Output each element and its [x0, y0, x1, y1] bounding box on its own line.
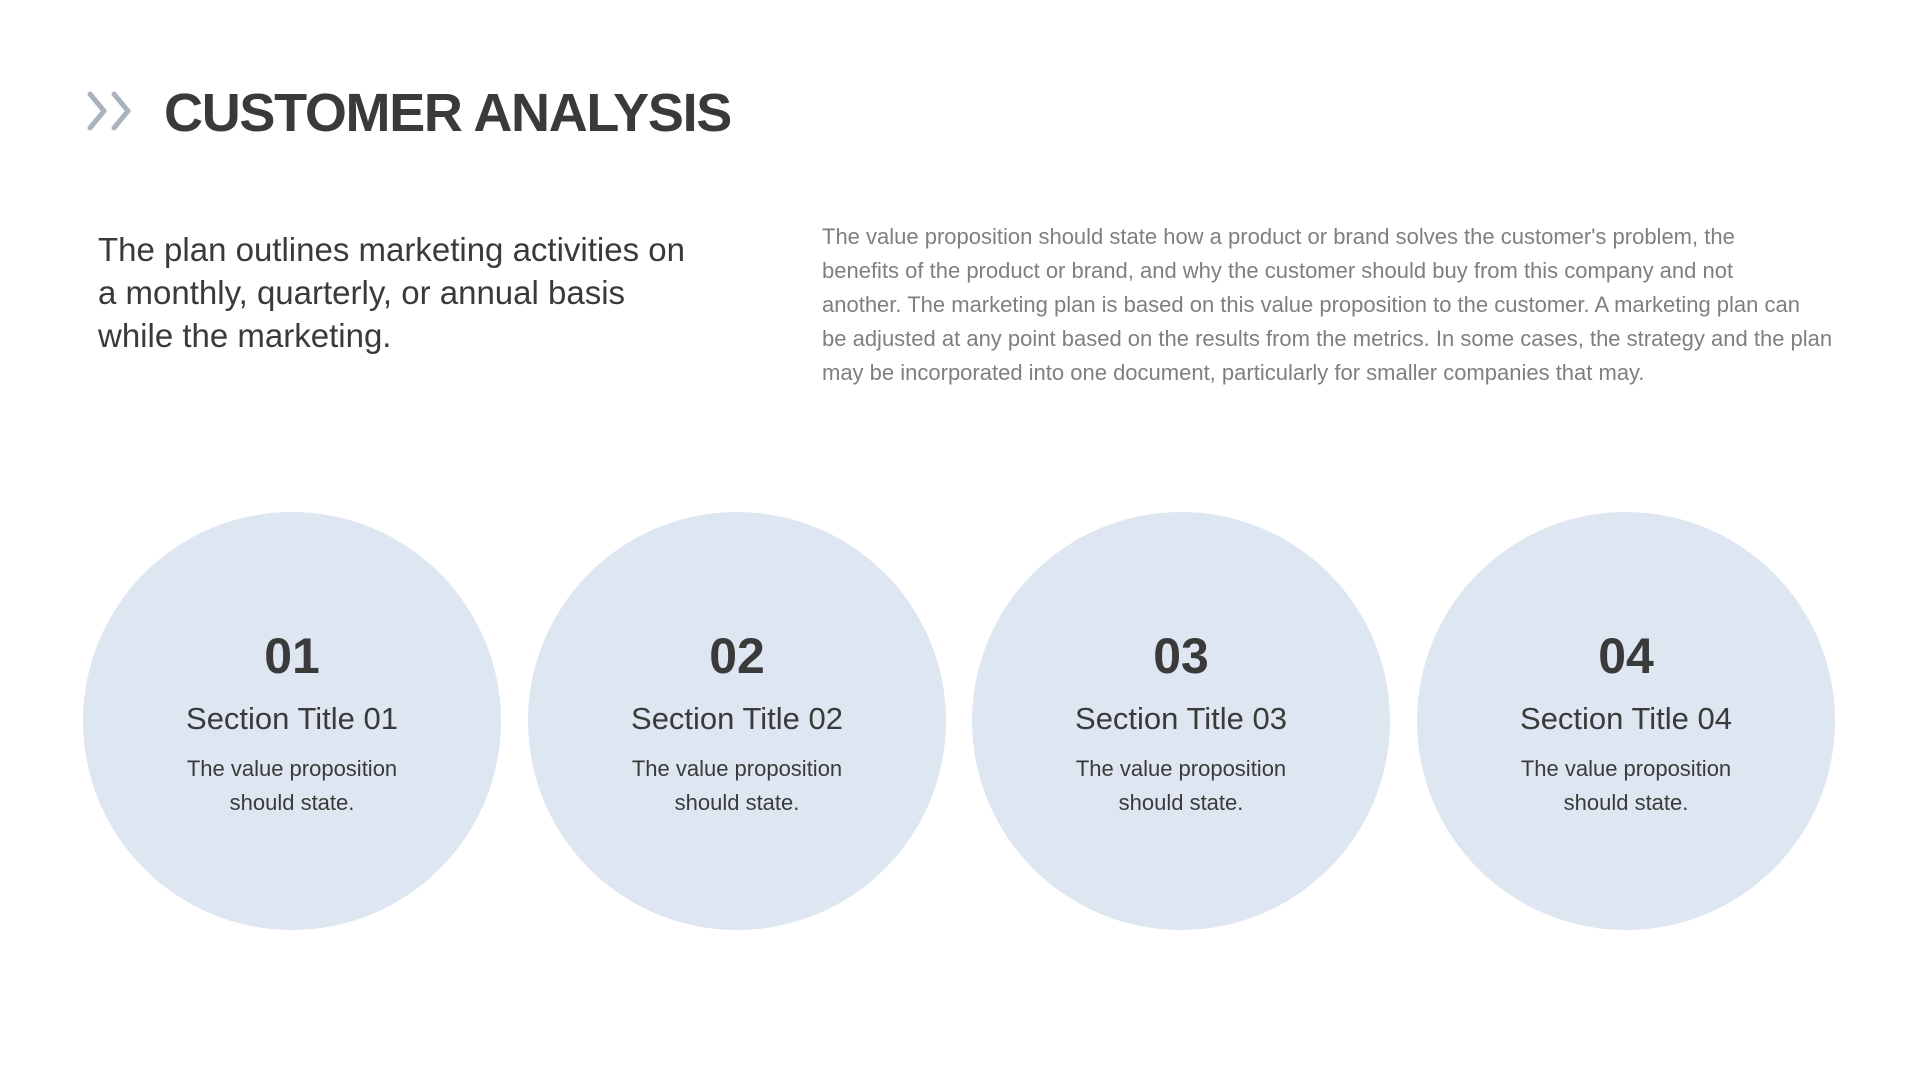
description 03: The value proposition: [1076, 756, 1286, 781]
description 01: should state.: [230, 790, 354, 815]
description 02: [632, 756, 842, 815]
intro text: while the marketing.: [98, 317, 391, 354]
description 03: should state.: [1119, 790, 1243, 815]
body paragraph: benefits of the product or brand, and why the customer should buy from this company and not: [822, 258, 1733, 283]
circle: section 01: [83, 512, 501, 930]
body paragraph: may be incorporated into one document, particularly for smaller companies that may.: [822, 360, 1645, 385]
circle: section 04: [1417, 512, 1835, 930]
description 04: The value proposition: [1521, 756, 1731, 781]
intro text: [98, 231, 685, 354]
section title 01: Section Title 01: [186, 701, 398, 736]
number 01: 01: [264, 628, 320, 684]
section title 03: Section Title 03: [1075, 701, 1287, 736]
circle: section 03: [972, 512, 1390, 930]
number 03: 03: [1153, 628, 1209, 684]
circle: section 02: [528, 512, 946, 930]
description 02: should state.: [675, 790, 799, 815]
body paragraph: [822, 224, 1832, 385]
description 03: [1076, 756, 1286, 815]
section title 02: Section Title 02: [631, 701, 843, 736]
icon: double chevron: [88, 92, 130, 130]
section title 04: Section Title 04: [1520, 701, 1732, 736]
number 04: 04: [1598, 628, 1654, 684]
body paragraph: be adjusted at any point based on the results from the metrics. In some cases, the strategy and the plan: [822, 326, 1832, 351]
title: CUSTOMER ANALYSIS: [164, 83, 731, 143]
number 02: 02: [709, 628, 765, 684]
body paragraph: another. The marketing plan is based on this value proposition to the customer. A marketing plan can: [822, 292, 1800, 317]
description 01: The value proposition: [187, 756, 397, 781]
intro text: The plan outlines marketing activities on: [98, 231, 685, 268]
body paragraph: The value proposition should state how a product or brand solves the customer's problem, the: [822, 224, 1735, 249]
description 01: [187, 756, 397, 815]
description 04: [1521, 756, 1731, 815]
intro text: a monthly, quarterly, or annual basis: [98, 274, 625, 311]
description 02: The value proposition: [632, 756, 842, 781]
description 04: should state.: [1564, 790, 1688, 815]
